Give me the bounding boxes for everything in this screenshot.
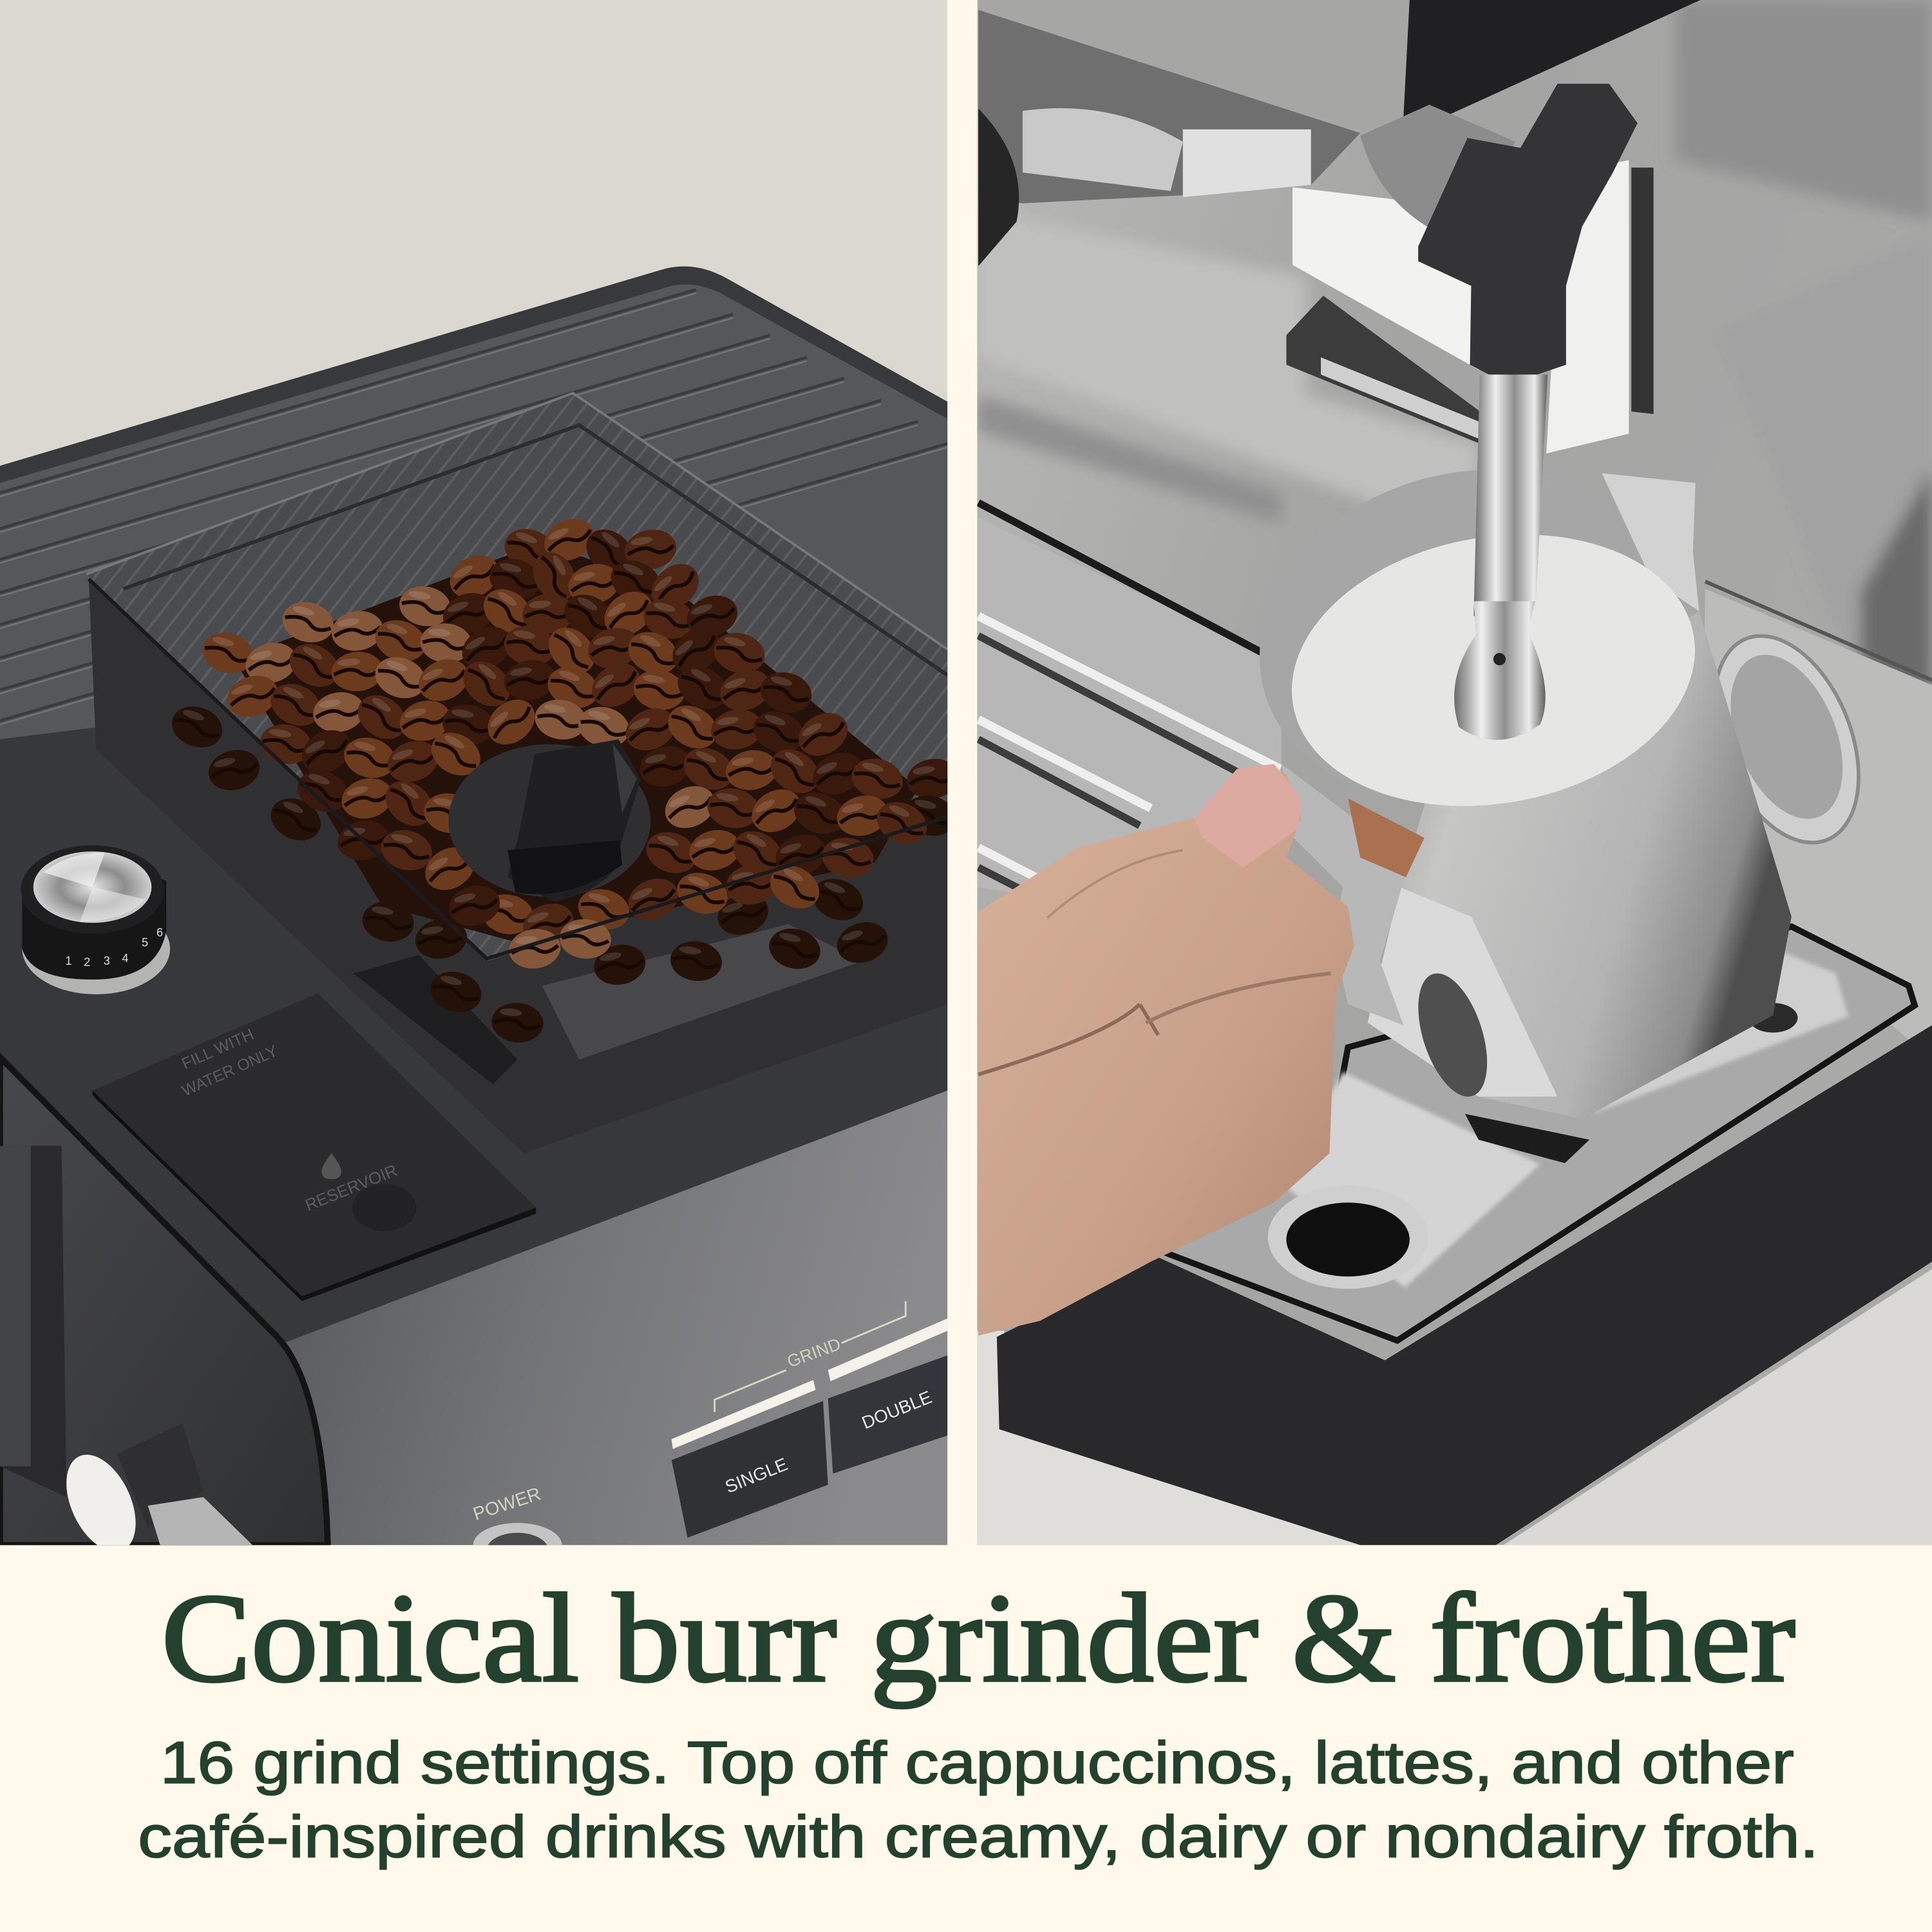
pitcher handle [1282, 764, 1405, 1025]
cream gutter between photos [947, 0, 977, 1545]
steam arm black grip [1418, 84, 1638, 384]
description text [138, 1730, 1819, 1870]
grind size knob [21, 845, 170, 994]
bean hopper body [86, 393, 947, 1153]
panel: milk frother photo [977, 0, 1932, 1545]
grind size knob: 4 [122, 952, 129, 965]
drip tray [997, 927, 1932, 1545]
hand [978, 764, 1354, 1336]
grind size knob: 5 [142, 936, 148, 949]
water reservoir plate: RESERVOIR [303, 1162, 400, 1215]
caption block [138, 1567, 1819, 1870]
grill arm reflection [1286, 296, 1484, 444]
thumbnail [1194, 764, 1301, 867]
water reservoir plate: FILL WITH [179, 1025, 256, 1073]
pressure gauge [1687, 615, 1887, 864]
steam knob [66, 1423, 252, 1546]
drip platform back edge [977, 503, 1932, 1059]
machine head [978, 0, 1700, 135]
control buttons [471, 1301, 947, 1567]
milk pitcher [1222, 424, 1792, 1119]
grind size knob: 2 [84, 956, 90, 969]
control buttons: DOUBLE [859, 1387, 934, 1433]
control buttons: SINGLE [722, 1454, 790, 1497]
title: Conical burr grinder & frother [162, 1567, 1795, 1709]
dark control surface [0, 727, 947, 1343]
grind size knob: 3 [104, 954, 110, 967]
coffee beans heap [166, 511, 961, 1045]
hopper lid dial [448, 739, 650, 902]
side panel of machine [0, 1057, 328, 1545]
machine front fascia [277, 1090, 947, 1545]
machine top tray [0, 267, 948, 1144]
bright reflection panel [1293, 160, 1629, 453]
water reservoir plate: WATER ONLY [179, 1042, 281, 1100]
reflections on backsplash [977, 0, 1932, 727]
countertop [977, 1331, 1368, 1545]
black bracket bar [1631, 167, 1654, 414]
control buttons: POWER [471, 1484, 544, 1525]
steam wand [1454, 375, 1548, 740]
grind size knob: 1 [65, 954, 72, 967]
description text: 16 grind settings. Top off cappuccinos, lattes, and other [160, 1730, 1794, 1795]
description text: café-inspired drinks with creamy, dairy or nondairy froth. [138, 1804, 1819, 1870]
portafilter [978, 10, 1515, 266]
water reservoir plate [92, 993, 536, 1301]
grind size knob: 6 [156, 926, 163, 939]
control buttons: GRIND [784, 1334, 844, 1371]
finger behind handle [1348, 799, 1425, 877]
hopper lid front edge [89, 579, 947, 959]
panel: conical burr grinder photo [0, 0, 961, 1567]
